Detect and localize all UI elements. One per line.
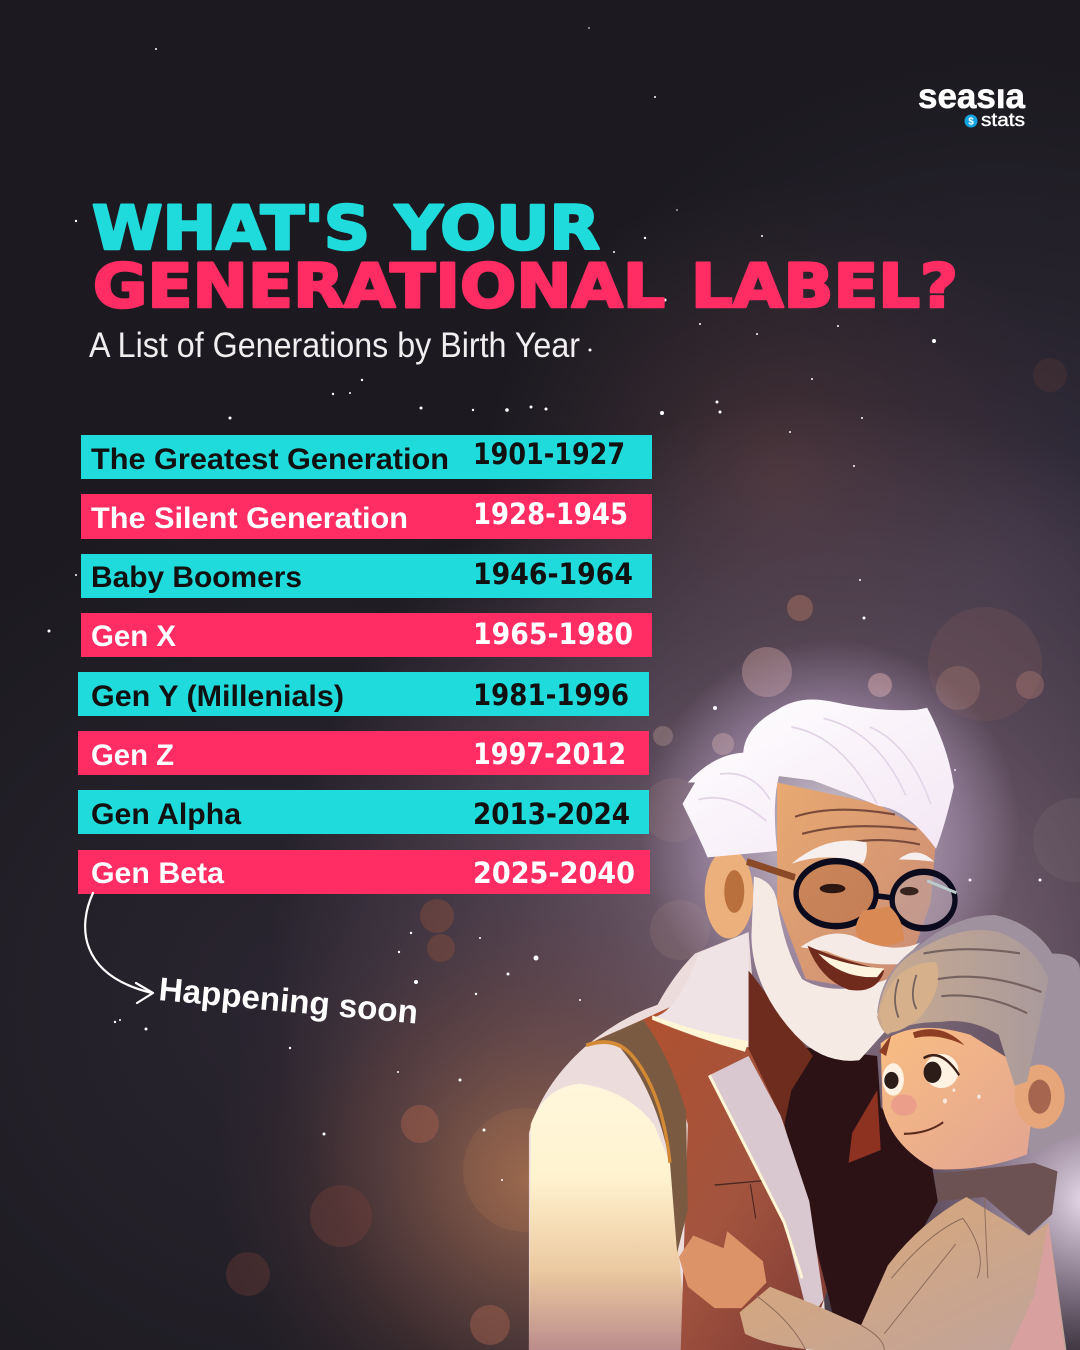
- row: Gen Alpha: 2013-2024: [473, 797, 630, 831]
- row: The Silent Generation: [81, 494, 652, 539]
- row: Gen Y (Millenials): Gen Y (Millenials): [91, 680, 344, 713]
- grandfather shirt: [720, 962, 938, 1350]
- row: Gen Z: 1997-2012: [473, 737, 626, 771]
- row: The Greatest Generation: 1901-1927: [473, 437, 625, 471]
- row: Gen Y (Millenials): [78, 672, 649, 716]
- mouth: [808, 946, 884, 990]
- star dust: [48, 27, 1042, 1181]
- grandfather vest and strap: [586, 988, 827, 1350]
- title line 1: WHAT'S: [92, 193, 370, 264]
- row: Gen Beta: Gen Beta: [91, 857, 224, 890]
- forehead wrinkles: [795, 810, 920, 849]
- title line 2: [93, 251, 958, 322]
- boy hair back: [877, 915, 1080, 1154]
- subtitle: A List of Generations by Birth Year: [89, 326, 580, 365]
- row: The Greatest Generation: [81, 435, 652, 479]
- logo wordmark: seasia: seasıa: [918, 77, 1026, 116]
- row: Gen X: [81, 613, 652, 657]
- row: Baby Boomers: Baby Boomers: [91, 561, 302, 594]
- row: Gen Beta: 2025-2040: [473, 856, 635, 890]
- row: The Greatest Generation: The Greatest Generation: [91, 443, 449, 476]
- row: Gen Z: Gen Z: [91, 739, 174, 772]
- eyebrows: [791, 840, 934, 864]
- boy nose and smile: [891, 1088, 981, 1134]
- generations table: [78, 435, 652, 894]
- glasses: [747, 861, 956, 928]
- boy eyes: [883, 1054, 959, 1096]
- boy face: [881, 1028, 1031, 1169]
- bokeh circles: [226, 358, 1080, 1345]
- grandfather coat and arm: [529, 932, 827, 1350]
- boy ear: [1015, 1065, 1065, 1129]
- row: Baby Boomers: [81, 554, 652, 598]
- boy jacket and arm: [740, 1197, 1066, 1350]
- grandfather hair: [683, 699, 954, 857]
- arrow: [85, 893, 153, 1003]
- row: Gen Beta: [78, 850, 650, 894]
- row: Baby Boomers: 1946-1964: [473, 557, 633, 591]
- coat lapels: [652, 932, 824, 1321]
- row: Gen Y (Millenials): 1981-1996: [473, 678, 629, 712]
- logo: [918, 77, 1026, 130]
- row: Gen Z: [78, 731, 649, 775]
- boy collar: [934, 1163, 1058, 1235]
- grandfather beard: [751, 877, 888, 1061]
- moustache: [800, 933, 920, 964]
- nose: [856, 906, 904, 946]
- glow behind characters: [640, 640, 1080, 1350]
- logo sub: stats: stats: [981, 110, 1025, 130]
- callout: Happening soon: Happening soon: [157, 970, 420, 1031]
- logo icon: blue coin: $: [968, 116, 974, 128]
- grandfather face: [777, 783, 936, 992]
- title line 1: YOUR: [394, 193, 600, 264]
- row: The Silent Generation: 1928-1945: [473, 497, 628, 531]
- row: Gen X: 1965-1980: [473, 617, 633, 651]
- illustration: grandfather hugging grandson: [529, 699, 1080, 1350]
- title: [92, 193, 958, 322]
- row: Gen X: Gen X: [91, 620, 176, 653]
- boy eyebrows: [879, 1029, 965, 1056]
- row: Gen Alpha: Gen Alpha: [91, 798, 241, 831]
- title line 1: [92, 193, 600, 264]
- row: Gen Alpha: [78, 790, 649, 834]
- title line 2: GENERATIONAL: [93, 251, 665, 322]
- title line 2: LABEL?: [691, 251, 958, 322]
- grandfather ear: [705, 849, 753, 939]
- row: The Silent Generation: The Silent Generation: [91, 502, 408, 535]
- boy hand: [679, 1231, 766, 1308]
- boy hair front: [877, 930, 1049, 1086]
